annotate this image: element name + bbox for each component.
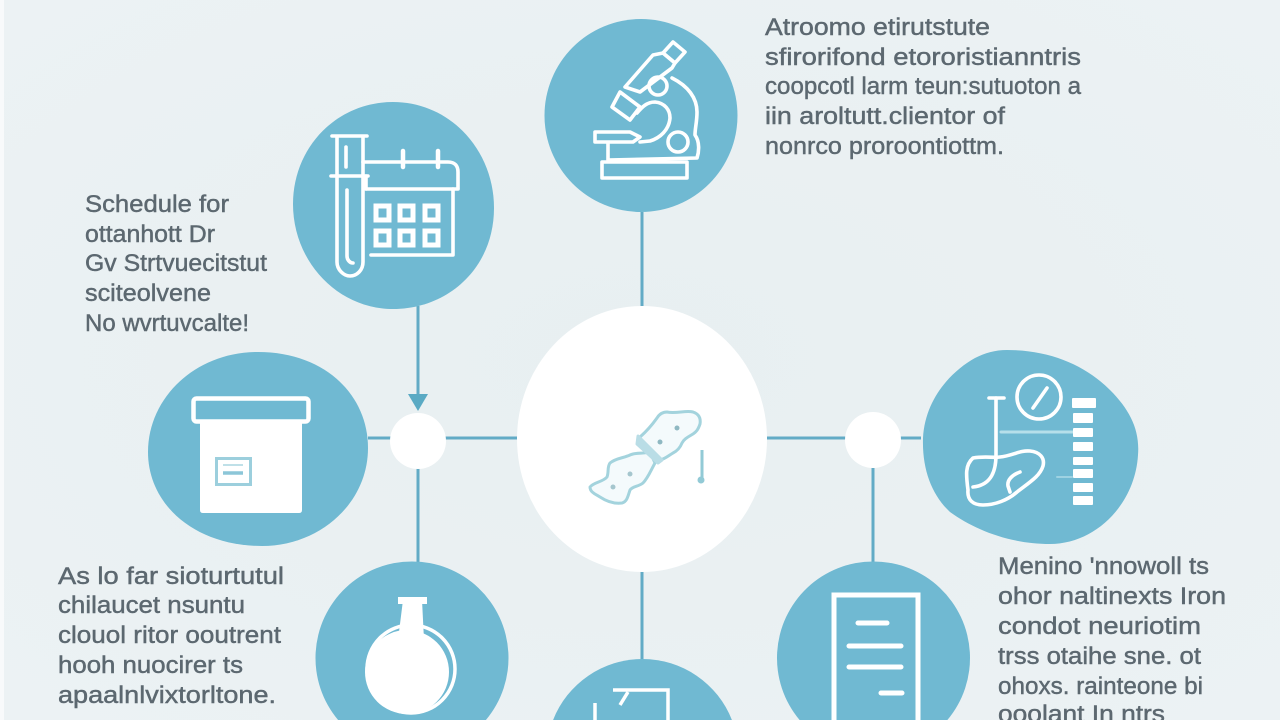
left junction node <box>390 413 446 469</box>
text: left lower: hooh nuocirer ts <box>58 652 243 679</box>
node: bottom partial icon <box>553 659 732 720</box>
icon: document <box>834 595 918 720</box>
text: top right: coopcotl larm teun:sutuoton a <box>765 73 1082 100</box>
icon: clipped chart <box>595 690 668 720</box>
connector lines <box>368 212 921 660</box>
text: left lower: chilaucet nsuntu <box>58 592 245 619</box>
node: microscope <box>544 19 738 212</box>
central circle with bone icon <box>517 306 767 572</box>
text: left upper: No wvrtuvcalte! <box>85 310 249 337</box>
icon: probe and liver <box>967 398 1073 505</box>
text: left lower: As lo far sioturtutul <box>58 563 284 590</box>
text: right lower: condot neuriotim <box>998 613 1201 640</box>
text: top right: nonrco proroontiottm. <box>765 133 1004 160</box>
text: left upper <box>85 191 267 337</box>
text: right lower <box>998 553 1226 720</box>
text: top right <box>765 14 1082 160</box>
icon: flask <box>365 597 455 714</box>
icon: calendar <box>363 151 458 255</box>
text: left upper: Gv Strtvuecitstut <box>85 250 267 277</box>
icon: microscope <box>595 42 699 178</box>
text: right lower: trss otaihe sne. ot <box>998 643 1201 670</box>
node: specimen container <box>148 352 368 546</box>
icon: bone fragments <box>590 411 700 503</box>
node: flask <box>316 561 508 720</box>
node: liver measurement <box>923 350 1138 544</box>
icon: container <box>194 398 308 513</box>
icon: drip <box>698 450 704 484</box>
text: right lower: ohoxs. rainteone bi <box>998 673 1203 700</box>
text: right lower: Menino 'nnowoll ts <box>998 553 1209 580</box>
node: document <box>777 561 970 720</box>
text: top right: sfirorifond etororistianntris <box>765 44 1081 71</box>
text: left lower <box>58 563 284 709</box>
icon: gauge <box>1017 375 1061 419</box>
text: right lower: ohor naltinexts Iron <box>998 583 1226 610</box>
text: top right: Atroomo etirutstute <box>765 14 990 41</box>
right junction node <box>845 412 901 468</box>
text: top right: iin aroltutt.clientor of <box>765 103 1005 130</box>
text: left upper: sciteolvene <box>85 280 211 307</box>
text: left lower: apaalnlvixtorltone. <box>58 682 276 709</box>
icon: measurement scale <box>1072 398 1096 505</box>
text: left lower: clouol ritor ooutrent <box>58 622 281 649</box>
text: left upper: Schedule for <box>85 191 229 218</box>
text: left upper: ottanhott Dr <box>85 221 215 248</box>
icon: test tube <box>331 136 368 276</box>
node: test tube and calendar <box>293 102 494 309</box>
arrow into left node <box>408 394 428 411</box>
